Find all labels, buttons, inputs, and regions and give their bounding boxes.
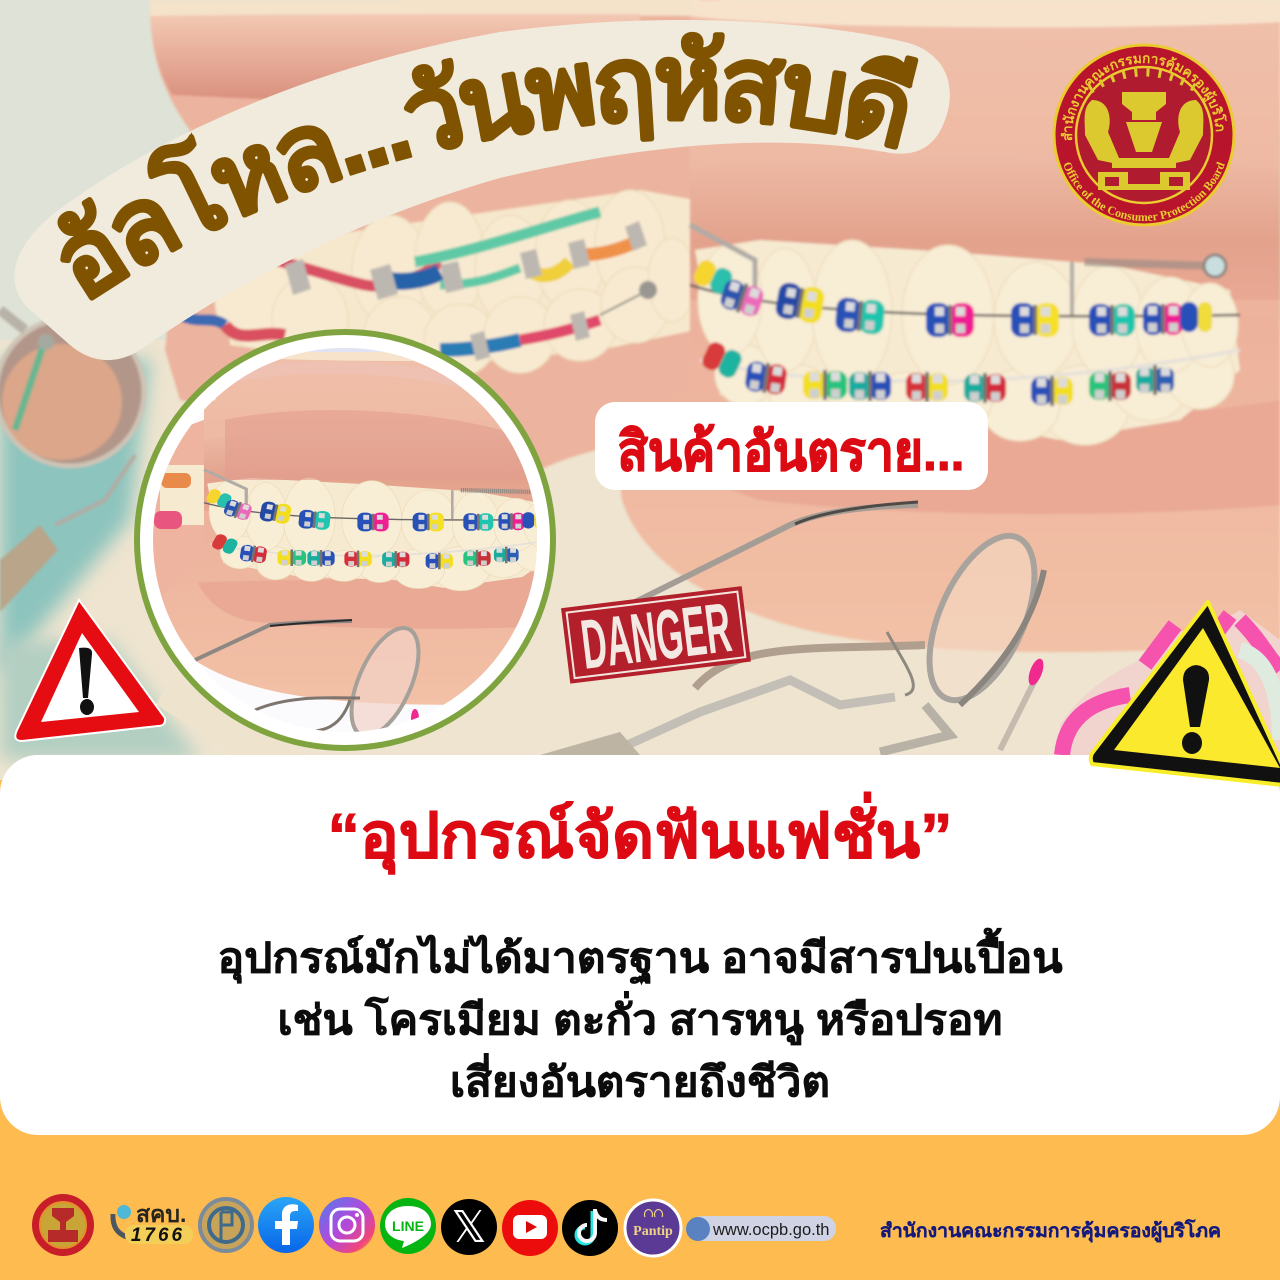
icon: facebook: [258, 1197, 314, 1253]
right dental tools: [540, 502, 1280, 760]
inset circular photo: [137, 332, 588, 748]
colored elastic chains: [265, 258, 440, 286]
hazard pill label: [595, 402, 988, 490]
icon: OCPB seal small: [32, 1194, 94, 1256]
icon: CPB logo: [200, 1199, 252, 1251]
DANGER stamp: [561, 586, 751, 686]
icon: hotline 1766: [113, 1201, 193, 1246]
DANGER stamp: DANGER: [577, 588, 735, 684]
icon: TikTok: [562, 1200, 618, 1256]
icon: instagram: [319, 1197, 375, 1253]
pink elastic ties: [1060, 610, 1280, 760]
icon: hotline 1766: สคบ.: [136, 1201, 186, 1227]
icon: X: [441, 1199, 497, 1255]
right jaw model: [621, 0, 1280, 652]
icon: hotline 1766: 1766: [131, 1225, 185, 1246]
footer band: [32, 1194, 1221, 1256]
left dental mirror: [0, 310, 144, 612]
website link pill: www.ocpb.go.th: [712, 1221, 829, 1239]
icon: LINE: [380, 1198, 436, 1254]
OCPB seal, top right: Office of the Consumer Protection Board: [1064, 162, 1225, 221]
panel body text: [218, 928, 1062, 1105]
icon: YouTube: [502, 1200, 558, 1256]
white text panel: [0, 755, 1280, 1135]
panel body text: อุปกรณ์มักไม่ได้มาตรฐาน อาจมีสารปนเปื้อน: [218, 928, 1062, 985]
icon: X: 𝕏: [451, 1203, 487, 1252]
banner shape: [14, 20, 950, 360]
hazard pill label: สินค้าอันตราย...: [618, 422, 964, 482]
panel body text: เช่น โครเมียม ตะกั่ว สารหนู หรือปรอท: [278, 991, 1002, 1046]
icon: Pantip: Pantip: [633, 1224, 673, 1239]
footer agency name: สำนักงานคณะกรรมการคุ้มครองผู้บริโภค: [880, 1219, 1221, 1243]
photo background: braces models on a dental tray: [0, 0, 1280, 780]
panel heading: “อุปกรณ์จัดฟันแฟชั่น”: [328, 792, 952, 874]
icon: LINE: LINE: [392, 1218, 424, 1234]
panel body text: เสี่ยงอันตรายถึงชีวิต: [450, 1053, 830, 1105]
icon: red warning triangle: [15, 600, 165, 741]
icon: yellow warning triangle: [1091, 602, 1280, 786]
OCPB seal, top right: [1052, 44, 1236, 226]
website link pill: [686, 1216, 836, 1241]
left jaw model: [150, 0, 720, 470]
banner title: อัลโหล...วันพฤหัสบดี: [58, 32, 918, 301]
icon: Pantip: [625, 1200, 681, 1256]
top banner: [14, 20, 950, 360]
